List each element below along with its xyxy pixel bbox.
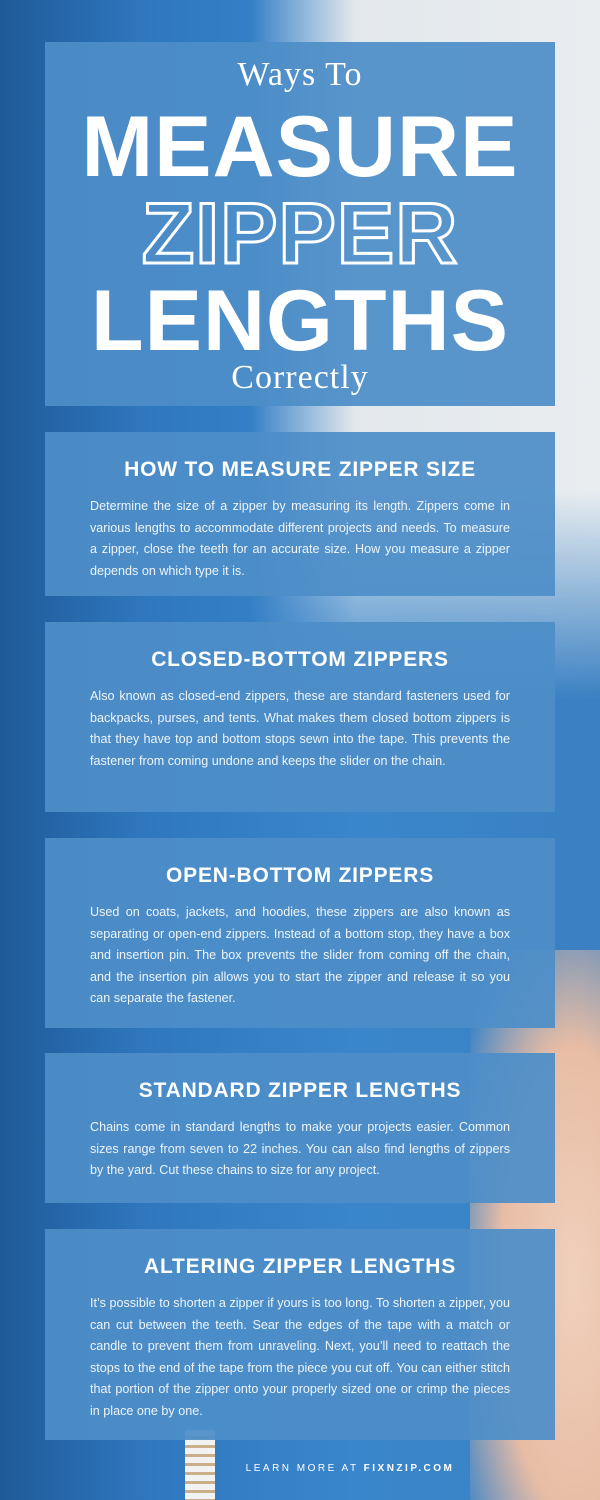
heading: ALTERING ZIPPER LENGTHS bbox=[144, 1255, 456, 1278]
footer: LEARN MORE AT FIXNZIP.COM bbox=[246, 1463, 454, 1474]
text: Used on coats, jackets, and hoodies, these zippers are also known as separating or open-end zippers. Instead of a bottom stop, they have a box and insertion pin. The box prevents the slider from coming off the chain, and the insertion pin allows you to start the zipper and release it so you can separate the fastener. bbox=[90, 905, 510, 1005]
heading: OPEN-BOTTOM ZIPPERS bbox=[166, 864, 434, 887]
panel: open-bottom bbox=[45, 838, 555, 1028]
text: Chains come in standard lengths to make your projects easier. Common sizes range from seven to 22 inches. You can also find lengths of zippers by the yard. Cut these chains to size for any project. bbox=[90, 1120, 510, 1177]
zipper teeth strip bbox=[185, 1430, 215, 1500]
heading: HOW TO MEASURE ZIPPER SIZE bbox=[124, 458, 476, 481]
panel: how to measure bbox=[45, 432, 555, 596]
text: It’s possible to shorten a zipper if yours is too long. To shorten a zipper, you can cut between the teeth. Sear the edges of the tape with a match or candle to prevent them from unraveling. Next, you’ll need to reattach the stops to the end of the tape from the piece you cut off. You can either stitch that portion of the zipper onto your properly sized one or crimp the pieces in place one by one. bbox=[90, 1296, 510, 1418]
title: Correctly: Correctly bbox=[231, 359, 369, 396]
heading: CLOSED-BOTTOM ZIPPERS bbox=[151, 648, 449, 671]
title: LENGTHS: LENGTHS bbox=[91, 273, 509, 369]
text: Determine the size of a zipper by measuring its length. Zippers come in various lengths to accommodate different projects and needs. To measure a zipper, close the teeth for an accurate size. How you measure a zipper depends on which type it is. bbox=[90, 499, 510, 578]
title panel bbox=[45, 42, 555, 406]
title: MEASURE: MEASURE bbox=[81, 99, 519, 195]
text: Also known as closed-end zippers, these are standard fasteners used for backpacks, purses, and tents. What makes them closed bottom zippers is that they have top and bottom stops sewn into the tape. This prevents the fastener from coming undone and keeps the slider on the chain. bbox=[90, 689, 510, 768]
panel: altering lengths bbox=[45, 1229, 555, 1440]
heading: STANDARD ZIPPER LENGTHS bbox=[139, 1079, 461, 1102]
panel: standard lengths bbox=[45, 1053, 555, 1203]
title: Ways To: Ways To bbox=[238, 56, 362, 93]
panel: closed-bottom bbox=[45, 622, 555, 812]
